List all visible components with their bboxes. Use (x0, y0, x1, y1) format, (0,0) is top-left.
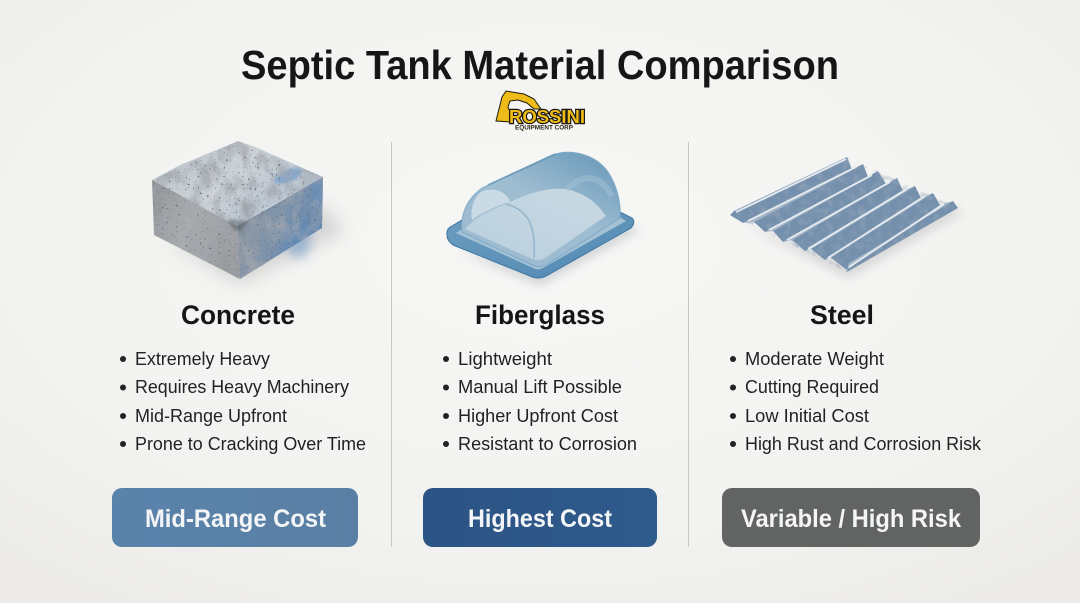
list: steel features: Cutting Required (745, 377, 879, 397)
list: fiberglass features (443, 349, 637, 454)
divider left (391, 142, 392, 547)
list: steel features: Moderate Weight (745, 349, 884, 369)
heading: concrete: Concrete (181, 300, 295, 330)
heading: steel: Steel (810, 300, 874, 330)
badge: variable / high risk (722, 488, 980, 547)
faces catching the light (743, 164, 953, 270)
title: Septic Tank Material Comparison (241, 42, 839, 88)
list: fiberglass features: Resistant to Corrosion (458, 434, 637, 454)
divider right (688, 142, 689, 547)
icon: concrete block (152, 141, 345, 284)
list: concrete features: Mid-Range Upfront (135, 406, 287, 426)
icon: fiberglass dome (447, 152, 640, 286)
list: fiberglass features: Higher Upfront Cost (458, 406, 618, 426)
highlights (736, 159, 944, 267)
badge: highest cost: Highest Cost (468, 505, 613, 533)
list: concrete features: Extremely Heavy (135, 349, 270, 369)
badge: mid-range cost (112, 488, 358, 547)
logo: Rossini Equipment Corp: ROSSINI (509, 107, 585, 127)
badge: mid-range cost: Mid-Range Cost (145, 505, 327, 533)
badge: highest cost (423, 488, 657, 547)
list: steel features (730, 349, 982, 454)
list: steel features: High Rust and Corrosion Risk (745, 434, 982, 454)
panel: concrete (112, 141, 366, 547)
list: concrete features: Requires Heavy Machinery (135, 377, 349, 397)
heading: fiberglass: Fiberglass (475, 300, 605, 330)
list: fiberglass features: Lightweight (458, 349, 552, 369)
panel: steel (722, 157, 982, 547)
logo: Rossini Equipment Corp (496, 91, 585, 132)
list: concrete features: Prone to Cracking Over Time (135, 434, 366, 454)
list: steel features: Low Initial Cost (745, 406, 869, 426)
panel: fiberglass (423, 152, 657, 547)
badge: variable / high risk: Variable / High Risk (741, 505, 961, 533)
logo: Rossini Equipment Corp: EQUIPMENT CORP (515, 126, 573, 132)
icon: corrugated steel sheet (730, 157, 964, 278)
list: concrete features (120, 349, 366, 454)
list: fiberglass features: Manual Lift Possible (458, 377, 622, 397)
faces facing away from the light (730, 157, 958, 272)
